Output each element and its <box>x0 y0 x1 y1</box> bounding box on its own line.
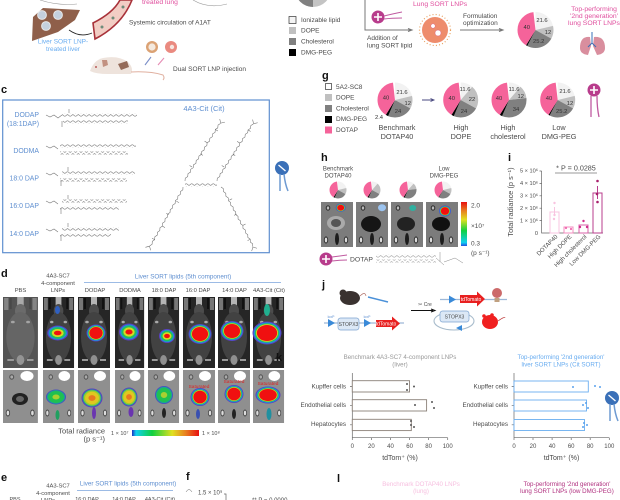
row: excised organs <box>3 370 284 423</box>
text: lung SORT LNPs: Lung SORT LNPs <box>413 1 468 8</box>
column headers: DODAP <box>85 288 105 294</box>
reporter construct: loxP <box>364 315 371 319</box>
panel i: bar chart total radiance: 3 × 10⁶ <box>520 192 538 200</box>
row: excised organs: Saturated <box>258 381 279 387</box>
arrow: addition bracket <box>365 0 412 32</box>
panel: lipid legend top: Ionizable lipid <box>301 17 341 24</box>
icon: liver <box>32 8 80 41</box>
label f: f <box>186 471 190 483</box>
captions: DOTAP40 <box>325 174 352 180</box>
x labels: High DOPE <box>547 234 573 260</box>
panel k left: benchmark bars: 80 <box>425 444 433 450</box>
panel k left: benchmark bars: 60 <box>406 444 414 450</box>
arrow: benchmark to variants <box>422 98 434 102</box>
panel k right: Cit SORT bars: liver SORT LNPs (Cit SORT) <box>521 362 601 368</box>
panel k right: Cit SORT bars: 20 <box>530 444 537 450</box>
panel d: whole body imaging <box>3 274 285 444</box>
panel k right: Cit SORT bars: 40 <box>549 444 556 450</box>
row: whole mice <box>3 297 284 368</box>
panel k left: benchmark bars: 20 <box>368 444 375 450</box>
panel k right: Cit SORT bars: Hepatocytes <box>473 421 508 428</box>
pie: benchmark: 24 <box>395 109 402 115</box>
color scale <box>461 202 490 257</box>
chemical structure: 4A3-Cit <box>145 118 258 251</box>
panel: formulation workflow <box>365 0 620 55</box>
label g: g <box>322 70 329 82</box>
text: addition of lipid: Addition of <box>367 35 398 42</box>
pie captions: DOPE <box>451 132 471 141</box>
text: addition of lipid <box>367 35 413 50</box>
panel: lipid legend top: DOPE <box>301 28 320 34</box>
column headers <box>15 274 285 294</box>
panel i: bar chart total radiance: 2 × 10⁶ <box>520 205 538 212</box>
pie: partial composition <box>295 0 331 7</box>
labels: lipid names: DODAP <box>14 112 39 119</box>
pie: high DOPE: 24 <box>461 109 468 115</box>
color scale: 2.0 <box>471 202 480 210</box>
column headers: 18:0 DAP <box>152 288 177 294</box>
pie: high DOPE: 11.6 <box>460 87 470 93</box>
captions <box>323 166 459 180</box>
label h: h <box>321 152 328 164</box>
legend: DOTAP <box>336 127 358 134</box>
pie: second generation: 40 <box>523 25 530 31</box>
DOTAP structure <box>320 252 463 266</box>
text: 4A3-Cit: 4A3-Cit (Cit) <box>183 104 225 113</box>
pie: second generation: 21.6 <box>536 18 548 24</box>
panel i: bar chart total radiance: 0 <box>535 231 538 237</box>
panel k left: benchmark bars: 100 <box>443 444 453 450</box>
panel l: headers: Top-performing '2nd generation' <box>524 481 610 488</box>
label l: l <box>337 473 340 485</box>
panel b: liver and lung treatment schematic <box>32 0 246 80</box>
color scale: ×10⁷ <box>471 223 485 230</box>
arrow: Cre <box>411 302 435 312</box>
row: excised organs: Saturated <box>224 379 245 385</box>
radiance scale <box>58 426 220 444</box>
panel k right: Cit SORT bars: 100 <box>604 444 615 450</box>
panel k left: benchmark bars: Hepatocytes <box>311 421 346 428</box>
labels: lipid names <box>7 112 39 238</box>
panel c: liver SORT lipid structures <box>3 100 289 253</box>
panel l: headers: Benchmark DOTAP40 LNPs <box>382 481 460 488</box>
x labels: High cholesterol <box>554 234 588 269</box>
icon: blood vessel <box>93 0 132 39</box>
panel f: chart top: 1.5 × 10⁹ <box>198 490 223 496</box>
text: top performing: '2nd generation' <box>570 13 618 20</box>
color scale: 0.3 <box>471 240 480 248</box>
pie captions: DOTAP40 <box>381 132 413 141</box>
panel: lipid legend top <box>289 0 341 56</box>
recombined construct <box>434 288 507 331</box>
icon: red mouse <box>482 313 505 329</box>
captions: DMG-PEG <box>430 174 459 180</box>
label e: e <box>1 472 7 484</box>
pie: low DMG-PEG: 40 <box>546 96 552 102</box>
panel k left: benchmark bars: 0 <box>351 444 355 450</box>
label k: k <box>276 352 283 364</box>
DOTAP structure: DOTAP <box>350 256 373 264</box>
icon: SORT lipid <box>372 10 402 24</box>
panel k right: Cit SORT bars: 0 <box>512 444 516 450</box>
labels: lipid names: (18:1DAP) <box>7 121 39 128</box>
pie captions: Benchmark <box>379 123 416 132</box>
pie: second generation <box>523 18 551 45</box>
panel k right: Cit SORT bars: 60 <box>568 444 575 450</box>
captions: Benchmark <box>323 166 354 172</box>
pie: high DOPE: 22 <box>469 97 475 103</box>
pie: high cholesterol: 40 <box>496 96 502 102</box>
icon: syringes <box>145 57 164 65</box>
labels: lipid names: 14:0 DAP <box>10 231 39 238</box>
panel k right: Cit SORT bars: 80 <box>587 444 594 450</box>
chemical structures <box>46 109 137 241</box>
pie: low DMG-PEG: 12 <box>567 101 573 107</box>
panel i: bar chart total radiance: 1 × 10⁶ <box>520 218 538 224</box>
arrow: Cre: ✂ Cre <box>418 302 432 308</box>
row: excised organs: Saturated <box>189 384 210 390</box>
arrow: optimization <box>460 28 503 32</box>
pie captions: High <box>500 123 516 132</box>
text: top performing: Top-performing <box>571 6 617 13</box>
panel l: headers: lung SORT LNPs (low DMG-PEG) <box>520 488 614 495</box>
icon: lung LNP <box>420 14 450 46</box>
legend: DOPE <box>336 94 355 102</box>
text: dual injection: Dual SORT LNP injection <box>173 66 246 73</box>
column headers: 4A3-Cit (Cit) <box>253 288 285 294</box>
icon: syringe <box>368 297 388 302</box>
text: top performing: lung SORT LNPs <box>568 20 620 27</box>
pie captions <box>379 123 577 141</box>
pie: high cholesterol <box>496 87 524 113</box>
panel: lipid legend top: DMG-PEG <box>301 50 332 56</box>
radiance scale: (p s⁻¹) <box>84 434 105 444</box>
pie: benchmark: 2.4 <box>375 115 384 121</box>
panel l: headers <box>382 481 614 495</box>
recombined construct: STOPX3 <box>445 314 465 320</box>
panel k left: benchmark bars: Benchmark 4A3-SC7 4-component LNPs <box>344 354 456 361</box>
panel i: bar chart total radiance: 4 × 10⁶ <box>520 180 538 187</box>
pie: high cholesterol: 11.6 <box>509 87 519 93</box>
color scale: (p s⁻¹) <box>471 250 490 257</box>
panel f: chart top <box>186 490 288 500</box>
labels: lipid names: 18:0 DAP <box>10 176 39 182</box>
panel k left: benchmark bars: tdTom⁺ (%) <box>382 455 418 462</box>
pie: high cholesterol: 12 <box>517 94 524 100</box>
icon: lungs <box>580 32 605 55</box>
column headers: LNPs <box>51 288 65 294</box>
panel i: bar chart total radiance: Total radiance (p s⁻¹) <box>506 167 515 237</box>
icon: Cit lipid <box>605 391 619 421</box>
column headers: 4A3-SC7 <box>46 274 70 280</box>
icon: black mouse <box>340 290 366 305</box>
column headers: 14:0 DAP <box>222 288 247 294</box>
panel e: headers: 4A3-SC7 <box>46 484 70 490</box>
panel i: bar chart total radiance: 5 × 10⁶ <box>520 168 538 174</box>
icon: DOTAP lipid <box>588 84 600 117</box>
text: addition of lipid: lung SORT lipid <box>367 42 413 50</box>
legend <box>325 84 369 134</box>
label j: j <box>321 279 325 291</box>
text: systemic circulation: Systemic circulation of A1AT <box>129 20 211 26</box>
text: liver treated: treated liver <box>46 46 81 53</box>
panel k right: Cit SORT bars: tdTom⁺ (%) <box>544 455 579 462</box>
column headers: DODMA <box>119 288 141 294</box>
reporter construct: tdTomato <box>376 322 396 328</box>
panel e: headers: Liver SORT lipids (5th component) <box>80 480 176 488</box>
radiance scale: 1 × 10⁸ <box>202 430 220 437</box>
pie: second generation: 12 <box>545 30 551 36</box>
text: liver treated: Liver SORT LNP- <box>38 38 88 46</box>
panel k left: benchmark bars: Endothelial cells <box>300 402 346 409</box>
x labels <box>536 234 603 269</box>
pie: benchmark: 40 <box>383 96 389 102</box>
panel i: bar chart total radiance <box>506 164 603 269</box>
panel k right: Cit SORT bars: Top-performing '2nd generation' <box>518 354 604 361</box>
panel l: headers: (lung) <box>413 488 429 495</box>
bars <box>550 180 602 233</box>
header: liver SORT lipids: Liver SORT lipids (5th component) <box>135 274 231 280</box>
pie: second generation: 25.2 <box>533 39 544 45</box>
recombined construct: tdTomato <box>461 297 481 303</box>
panel j: Cre reporter schematic <box>324 288 507 331</box>
panel g: pie formulations <box>325 84 600 141</box>
pie: low DMG-PEG <box>546 89 573 115</box>
x labels: Low DMG-PEG <box>569 234 603 268</box>
radiance scale: Total radiance <box>58 426 105 436</box>
pie: high DOPE <box>448 87 475 115</box>
panel e: headers <box>9 480 176 500</box>
labels: lipid names: 16:0 DAP <box>10 203 39 210</box>
pie captions: High <box>453 123 469 132</box>
pie: high cholesterol: 34 <box>513 107 520 113</box>
legend: 5A2-SC8 <box>336 84 363 91</box>
panel k left: benchmark bars: (liver) <box>392 362 408 368</box>
panel h: organ imaging <box>320 166 490 266</box>
panel k left: benchmark bars <box>300 354 456 462</box>
icon: two LNPs <box>146 41 177 53</box>
reporter construct <box>324 315 404 330</box>
text: top performing <box>568 6 620 27</box>
mini pies <box>334 186 447 194</box>
icon: mouse <box>90 57 164 80</box>
reporter construct: loxP <box>328 315 335 319</box>
panel k right: Cit SORT bars <box>462 354 619 462</box>
panel k left: benchmark bars: Kupffer cells <box>311 384 346 390</box>
arrow: liver to circulation <box>69 30 92 35</box>
label c: c <box>1 84 7 96</box>
panel k right: Cit SORT bars: Kupffer cells <box>473 384 508 390</box>
pie captions: DMG-PEG <box>542 132 577 141</box>
text: formulation optimization: Formulation <box>463 13 498 20</box>
column headers: PBS <box>15 288 26 294</box>
text: formulation optimization <box>463 13 498 27</box>
panel: lipid legend top: Cholesterol <box>301 38 334 46</box>
reporter construct: STOPX3 <box>339 322 359 328</box>
text: formulation optimization: optimization <box>463 20 498 27</box>
panel k left: benchmark bars: 40 <box>387 444 394 450</box>
organ images <box>321 202 458 247</box>
legend: Cholesterol <box>336 106 369 112</box>
x labels: DOTAP40 <box>536 234 560 257</box>
panel k right: Cit SORT bars: Endothelial cells <box>462 402 508 409</box>
label i: i <box>508 152 511 164</box>
legend: DMG-PEG <box>336 116 367 123</box>
icon: Cit lipid <box>275 161 289 191</box>
panel e: headers: 4-component <box>36 491 70 497</box>
column headers: 16:0 DAP <box>186 288 211 294</box>
pie: low DMG-PEG: 25.2 <box>556 109 567 115</box>
pie captions: Low <box>552 123 566 132</box>
pie: benchmark: 12 <box>404 101 411 107</box>
labels: lipid names: DODMA <box>13 148 39 155</box>
text: liver treated <box>38 38 88 53</box>
pie: benchmark: 21.6 <box>396 90 408 96</box>
pie: high DOPE: 40 <box>448 96 455 102</box>
column headers: 4-component <box>41 281 75 287</box>
label d: d <box>1 268 8 280</box>
pie: benchmark <box>375 90 411 121</box>
radiance scale: 1 × 10⁷ <box>111 430 128 437</box>
pie captions: cholesterol <box>490 132 526 141</box>
significance: * P = 0.0285 <box>556 164 596 172</box>
captions: Low <box>438 166 450 172</box>
pie: low DMG-PEG: 21.6 <box>559 89 571 95</box>
